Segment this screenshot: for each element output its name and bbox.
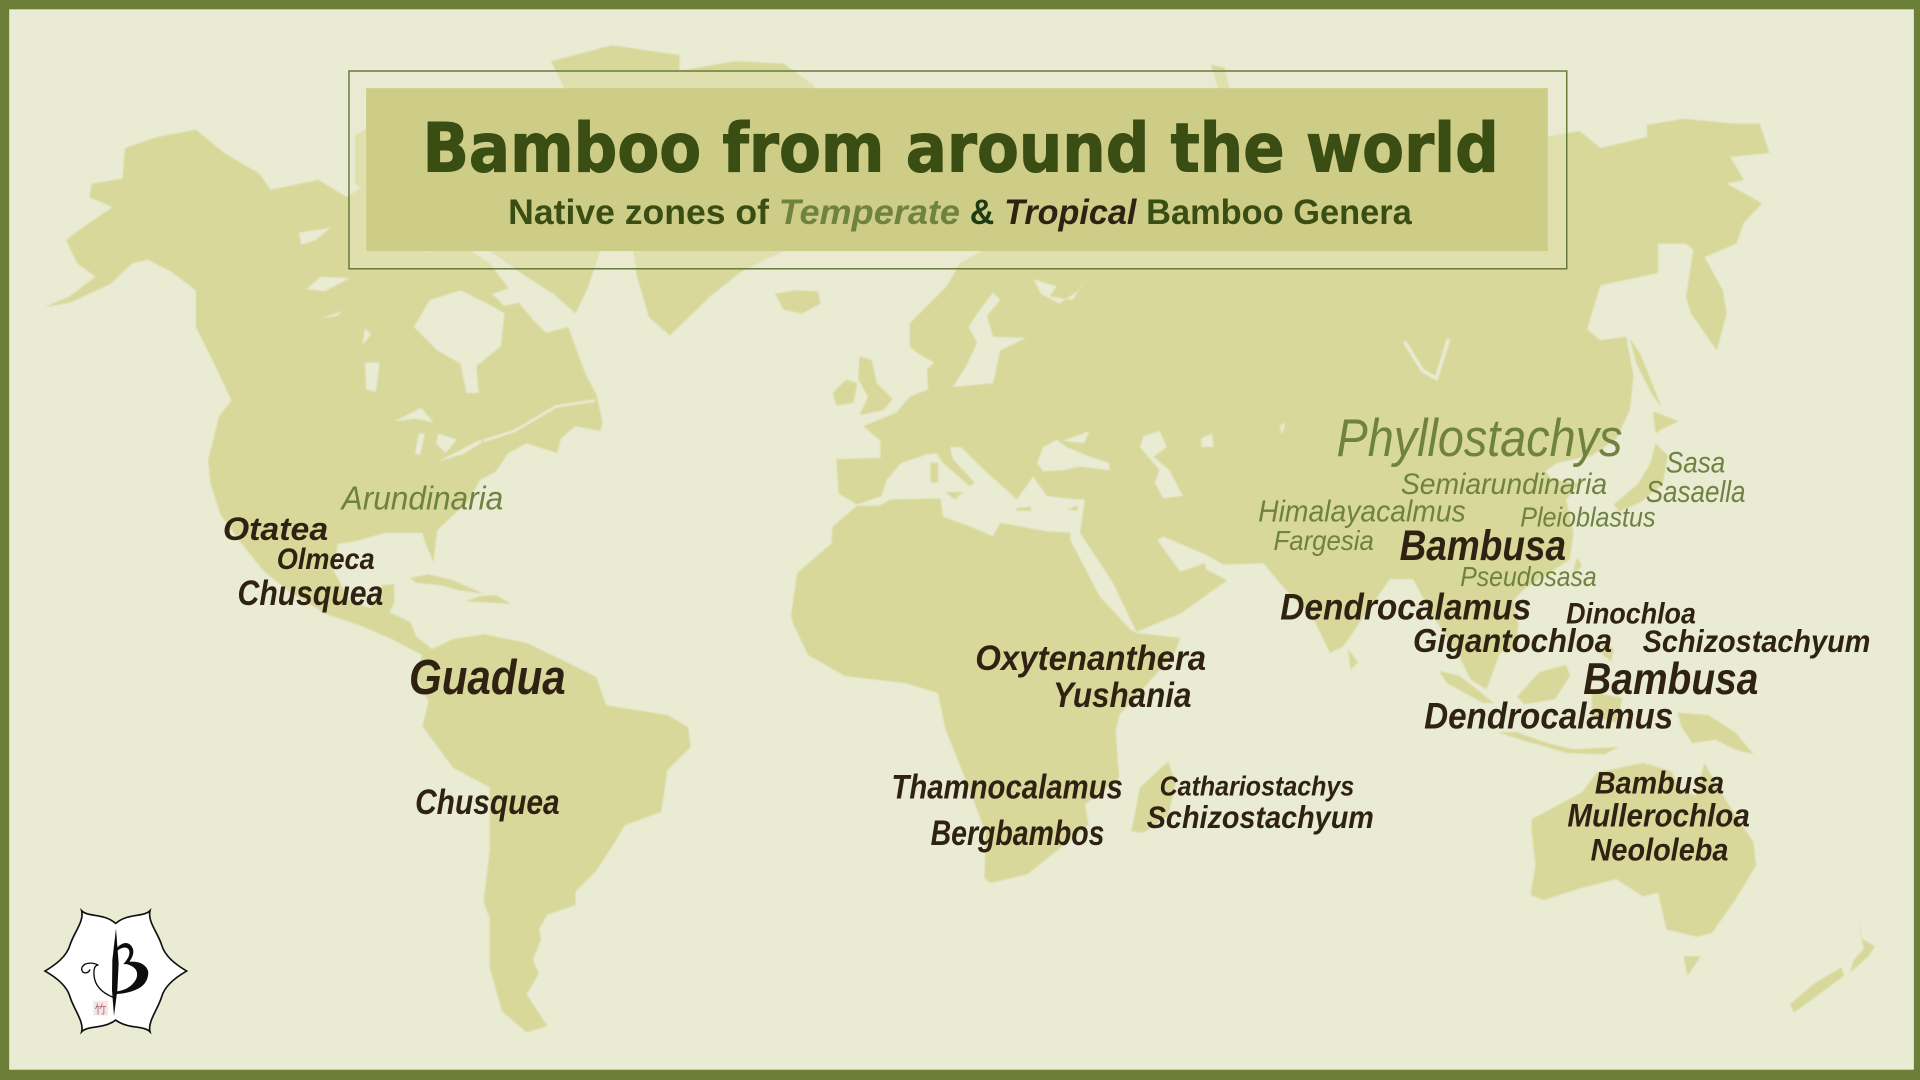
hudson strait	[492, 287, 551, 316]
temperate genera labels: Semiarundinaria	[1401, 468, 1607, 501]
land: new zealand south	[1790, 967, 1844, 1013]
white sea	[1033, 273, 1090, 304]
land: arctic islands of russia	[1211, 65, 1229, 89]
baltic sea	[953, 293, 1026, 387]
cyprus	[1067, 506, 1078, 511]
land: new zealand north	[1850, 918, 1875, 972]
land: java and lesser sunda	[1498, 732, 1619, 754]
subtitle: Temperate	[779, 192, 960, 232]
land: cuba	[410, 574, 484, 594]
subtitle: Native zones of	[508, 192, 769, 232]
temperate genera labels: Fargesia	[1273, 525, 1374, 556]
tropical genera labels: Mullerochloa	[1567, 798, 1750, 834]
tropical genera labels: Schizostachyum	[1147, 799, 1374, 835]
logo: stamp: 竹	[95, 1002, 107, 1016]
subtitle	[508, 192, 1412, 232]
lake winnipeg	[365, 362, 380, 392]
lake superior	[394, 408, 433, 422]
logo: lotus badge	[45, 911, 187, 1032]
logo	[45, 911, 187, 1032]
aral sea	[1201, 433, 1213, 447]
temperate genera labels: Himalayacalmus	[1258, 495, 1466, 529]
land: hispaniola	[465, 595, 511, 604]
sicily	[945, 492, 962, 500]
land: africa	[791, 498, 1180, 883]
land: tasmania	[1684, 956, 1701, 976]
tropical genera labels: Cathariostachys	[1160, 771, 1354, 802]
tropical genera labels: Dinochloa	[1566, 597, 1696, 630]
temperate genera labels: Phyllostachys	[1337, 409, 1622, 468]
title panel	[349, 71, 1567, 269]
land: ireland	[833, 380, 857, 405]
temperate genera labels: Sasa	[1666, 447, 1725, 480]
tropical genera labels: Dendrocalamus	[1424, 696, 1673, 737]
land: great britain	[858, 356, 893, 415]
tropical genera labels: Dendrocalamus	[1280, 587, 1531, 628]
land: new guinea	[1678, 713, 1753, 754]
title: Bamboo from around the world	[422, 108, 1499, 187]
lake michigan	[415, 433, 425, 456]
tropical genera labels: Bambusa	[1583, 655, 1758, 704]
water cut-outs	[299, 228, 1449, 498]
tropical genera labels: Oxytenanthera	[975, 639, 1206, 678]
land: honshu	[1614, 443, 1668, 512]
tropical genera labels: Bambusa	[1400, 522, 1566, 570]
tropical genera labels	[223, 511, 1870, 867]
tropical genera labels: Thamnocalamus	[891, 768, 1123, 806]
tropical genera labels: Gigantochloa	[1413, 623, 1612, 660]
mediterranean islands	[931, 463, 1078, 511]
azov sea	[1063, 431, 1090, 443]
temperate genera labels: Pseudosasa	[1460, 561, 1597, 592]
tropical genera labels: Otatea	[223, 511, 328, 547]
subtitle: Tropical	[1004, 192, 1137, 232]
land: sumatra	[1439, 671, 1494, 703]
lake baikal	[1404, 339, 1449, 378]
tropical genera labels: Bergbambos	[931, 813, 1104, 853]
land: iceland	[775, 290, 820, 313]
black sea	[1037, 440, 1109, 471]
title box	[366, 88, 1548, 251]
tropical genera labels: Schizostachyum	[1643, 624, 1870, 659]
crete	[1016, 507, 1031, 511]
arctic channels	[299, 228, 331, 245]
subtitle: &	[970, 192, 994, 232]
land: sri lanka	[1348, 649, 1358, 670]
sardinia and corsica	[931, 463, 938, 482]
temperate genera labels: Arundinaria	[340, 480, 503, 517]
temperate genera labels	[340, 409, 1746, 592]
temperate genera labels: Sasaella	[1646, 475, 1746, 509]
tropical genera labels: Neololeba	[1591, 831, 1728, 867]
land: sulawesi	[1592, 692, 1622, 722]
land: australia	[1531, 763, 1756, 937]
lake huron	[436, 433, 457, 453]
land: madagascar	[1131, 762, 1176, 833]
land: sakhalin	[1630, 338, 1662, 408]
hudson bay	[414, 290, 504, 393]
land: eurasia	[836, 119, 1769, 689]
land: canadian arctic islands	[355, 116, 612, 313]
temperate genera labels: Pleioblastus	[1520, 502, 1656, 533]
lakes erie and ontario	[437, 440, 482, 462]
tropical genera labels: Yushania	[1053, 675, 1191, 715]
land: greenland	[551, 45, 814, 336]
tropical genera labels: Chusquea	[238, 573, 383, 613]
land: philippines	[1602, 643, 1614, 661]
land: south america	[416, 634, 691, 1032]
tropical genera labels: Guadua	[409, 651, 566, 705]
tropical genera labels: Chusquea	[415, 782, 560, 822]
land: north america	[44, 130, 602, 655]
title frame	[349, 71, 1567, 269]
logo: monogram	[82, 928, 148, 1016]
balkhash	[1280, 422, 1286, 435]
caspian sea	[1140, 431, 1183, 498]
land: taiwan	[1572, 557, 1582, 576]
subtitle: Bamboo Genera	[1146, 192, 1412, 232]
saint lawrence	[484, 400, 595, 441]
tropical genera labels: Olmeca	[277, 543, 375, 576]
land: borneo	[1517, 665, 1570, 704]
land: hokkaido	[1653, 411, 1679, 433]
tropical genera labels: Bambusa	[1595, 764, 1724, 800]
